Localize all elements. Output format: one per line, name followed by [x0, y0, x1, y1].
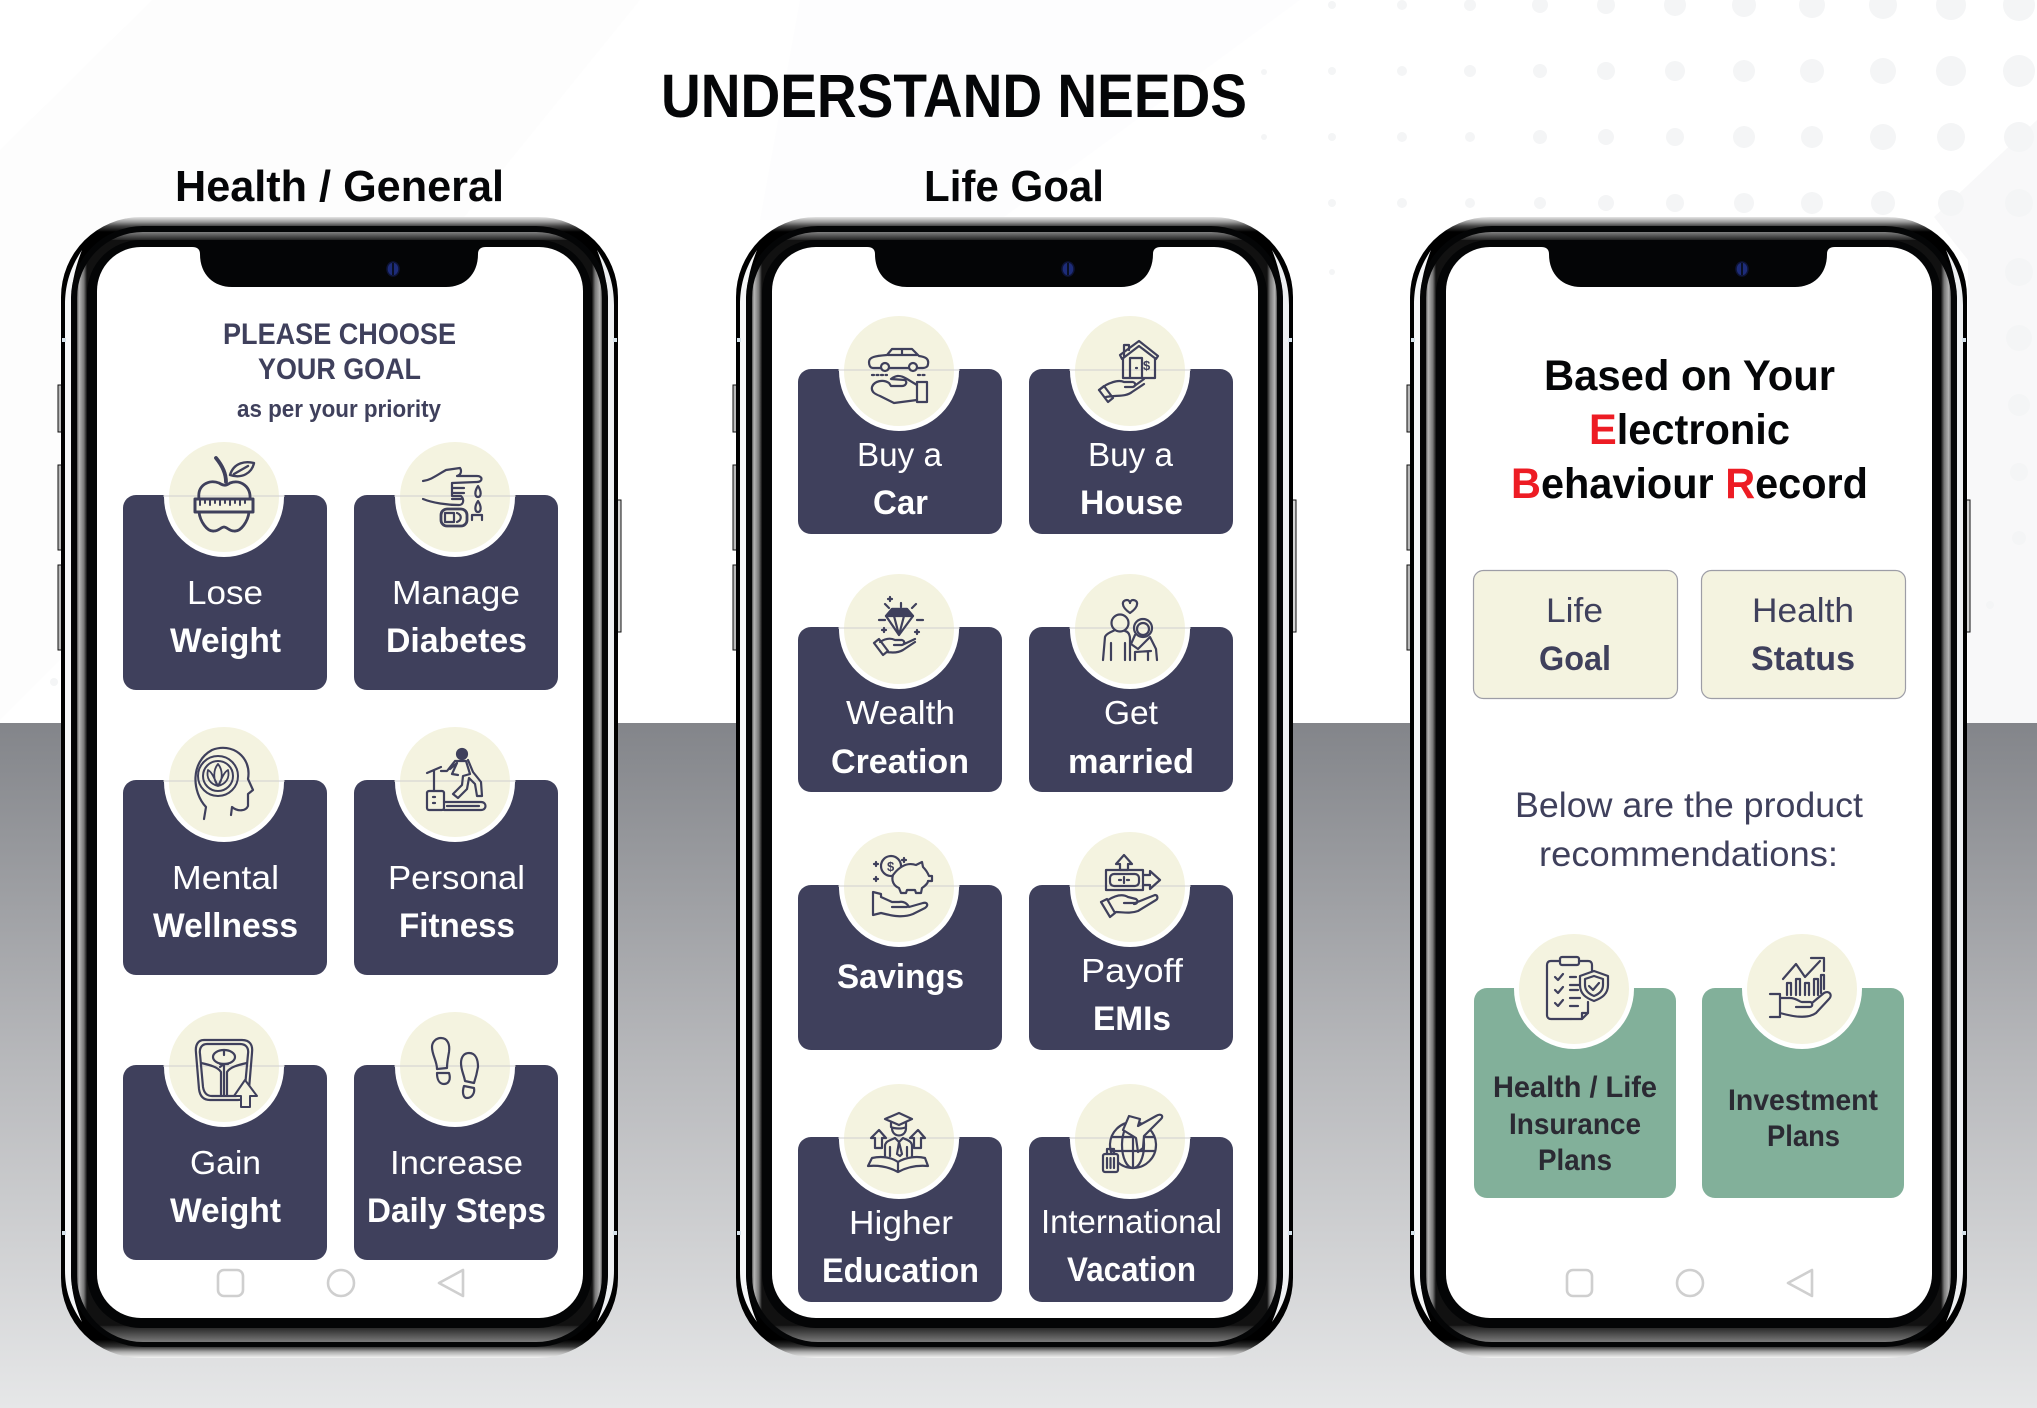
card: International Vacation [1029, 1079, 1233, 1302]
icon: piggy bank on hand [873, 856, 932, 916]
card: Higher Education: Education [822, 1252, 979, 1290]
card: International Vacation: Vacation [1067, 1251, 1196, 1289]
panel: health / general phone [58, 217, 621, 1358]
card: Gain Weight: Gain [190, 1144, 261, 1181]
icon: head with lotus [195, 748, 253, 819]
card: Buy a Car: Buy a [857, 436, 943, 473]
heading: Life Goal: Life Goal [924, 162, 1104, 211]
card: Manage Diabetes: Diabetes [386, 622, 527, 660]
card: Increase Daily Steps [354, 1007, 558, 1260]
card: Increase Daily Steps: Increase [390, 1144, 523, 1181]
card: Buy a Car [798, 311, 1002, 534]
card: Payoff EMIs: Payoff [1081, 952, 1184, 989]
card: Savings [798, 827, 1002, 1050]
card: Gain Weight [123, 1007, 327, 1260]
card: Investment Plans: Investment [1728, 1084, 1878, 1117]
card: Buy a House [1029, 311, 1233, 534]
card: Lose Weight: Weight [170, 622, 281, 660]
card: Wealth Creation: Wealth [846, 694, 955, 731]
phone frame [733, 217, 1296, 1358]
navigation bar [1567, 1270, 1812, 1296]
prompt text: YOUR GOAL [258, 353, 421, 386]
icon: house on hand: $ [1143, 358, 1151, 373]
card: Mental Wellness: Wellness [153, 907, 298, 945]
navigation bar [218, 1270, 463, 1296]
heading: Based on Your Electronic Behaviour Record [1511, 352, 1868, 508]
card: Buy a Car: Car [873, 484, 928, 522]
text: product recommendations intro: Below are the product [1515, 786, 1863, 825]
card: Health / Life Insurance Plans: Health / Life [1493, 1071, 1657, 1104]
icon: diamond on hand [874, 597, 923, 655]
card: Buy a House: Buy a [1088, 436, 1174, 473]
icon: globe, plane and suitcase [1103, 1115, 1162, 1172]
card: Payoff EMIs [1029, 827, 1233, 1050]
heading: Based on Your Electronic Behaviour Record: Electronic [1589, 406, 1790, 454]
card: Mental Wellness [123, 722, 327, 975]
card: Manage Diabetes [354, 437, 558, 690]
card: Get married: Get [1104, 694, 1158, 731]
card: Increase Daily Steps: Daily Steps [367, 1192, 546, 1230]
icon: footprints [432, 1038, 478, 1098]
card: Lose Weight: Lose [187, 574, 263, 611]
panel: recommendations phone [1407, 217, 1970, 1358]
card: Wealth Creation [798, 569, 1002, 792]
card: Manage Diabetes: Manage [392, 574, 520, 611]
card: Personal Fitness [354, 722, 558, 975]
card: Personal Fitness: Personal [388, 859, 525, 896]
text: product recommendations intro: recommendations: [1539, 835, 1838, 874]
card: Lose Weight [123, 437, 327, 690]
heading: Based on Your Electronic Behaviour Record: Based on Your [1544, 352, 1835, 400]
card: Savings: Savings [837, 958, 964, 996]
card: Get married [1029, 569, 1233, 792]
prompt text: PLEASE CHOOSE [223, 318, 456, 351]
button: Health Status: Status [1751, 640, 1855, 678]
title: UNDERSTAND NEEDS [661, 62, 1247, 130]
card: Higher Education: Higher [849, 1204, 953, 1241]
icon: graduate on book [868, 1113, 928, 1172]
heading: Health / General: Health / General [175, 162, 504, 211]
button: Life Goal: Life [1546, 592, 1603, 630]
card: Health / Life Insurance Plans: Plans [1538, 1144, 1612, 1177]
icon: glucose meter and finger [423, 468, 482, 526]
card: Investment Plans: Plans [1767, 1120, 1840, 1153]
icon: piggy bank on hand: $ [887, 859, 895, 874]
card: Wealth Creation: Creation [831, 743, 969, 781]
button: Life Goal: Goal [1539, 640, 1611, 678]
card: International Vacation: International [1041, 1203, 1222, 1240]
icon: weighing scale with arrow [196, 1040, 257, 1107]
icon: growth chart on hand [1770, 958, 1831, 1017]
card: Get married: married [1068, 743, 1194, 781]
card: Gain Weight: Weight [170, 1192, 281, 1230]
prompt text [223, 318, 456, 423]
card: Health / Life Insurance Plans [1474, 929, 1676, 1198]
heading: Based on Your Electronic Behaviour Record: Behaviour Record [1511, 460, 1868, 508]
icon: house on hand [1099, 341, 1158, 402]
card: Investment Plans [1702, 929, 1904, 1198]
icon: couple with heart [1103, 600, 1157, 660]
card: Buy a House: House [1080, 484, 1183, 522]
button: Health Status: Health [1752, 592, 1854, 630]
card: Higher Education [798, 1079, 1002, 1302]
icon: apple with tape [195, 458, 254, 531]
card: Mental Wellness: Mental [172, 859, 279, 896]
icon: checklist with shield [1547, 957, 1608, 1019]
icon: car on hand [869, 349, 928, 403]
card: Personal Fitness: Fitness [399, 907, 515, 945]
phone frame [1407, 217, 1970, 1358]
prompt text: as per your priority [237, 396, 442, 423]
phone frame [58, 217, 621, 1358]
button: Health Status [1702, 570, 1906, 698]
card: Payoff EMIs: EMIs [1093, 1000, 1171, 1038]
text: product recommendations intro [1515, 786, 1863, 874]
icon: money with arrows on hand [1101, 855, 1160, 917]
panel: life goal phone [733, 217, 1296, 1358]
icon: treadmill runner [427, 749, 486, 810]
card: Health / Life Insurance Plans: Insurance [1509, 1108, 1641, 1141]
button: Life Goal [1474, 570, 1678, 698]
